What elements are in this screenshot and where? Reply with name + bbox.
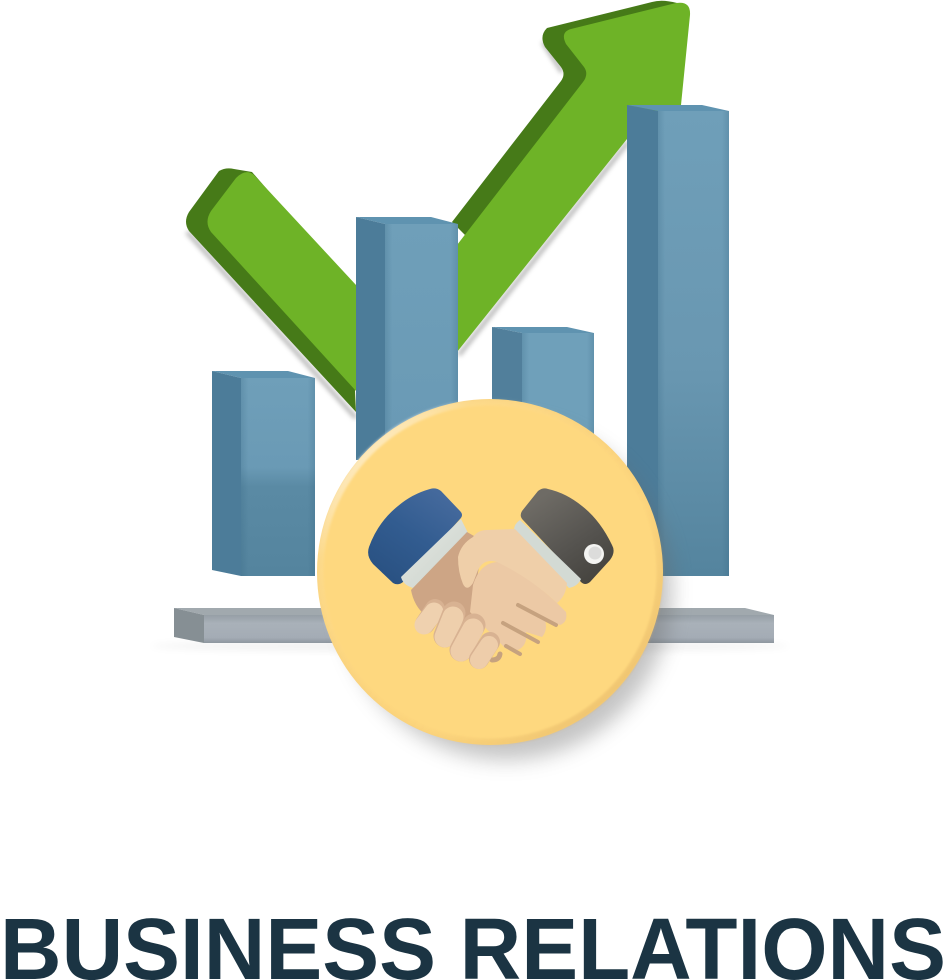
chart base platform (174, 608, 774, 643)
right dark cuff (521, 488, 614, 584)
coin badge (317, 399, 663, 745)
thumb and upper hand (458, 529, 567, 603)
right shirt cuff (514, 520, 581, 588)
left darker hand (411, 532, 480, 625)
bar chart (212, 105, 729, 576)
cuff button (584, 544, 604, 564)
coin shadow (340, 420, 672, 760)
left fingers (424, 609, 490, 660)
left blue cuff (368, 488, 462, 584)
icon: handshake (368, 488, 614, 660)
left shirt cuff (401, 519, 468, 588)
bar 4 (627, 105, 729, 576)
palm and right fingers (470, 562, 566, 660)
bar 2 (356, 217, 458, 460)
arrow: green growth arrow (186, 1, 690, 440)
ground shadow (150, 640, 790, 652)
bar 1 (212, 371, 315, 576)
arrow soft shadow (187, 42, 628, 418)
arrow bright face (208, 3, 690, 440)
bar 3 (492, 327, 594, 440)
arrow dark side (186, 1, 677, 412)
